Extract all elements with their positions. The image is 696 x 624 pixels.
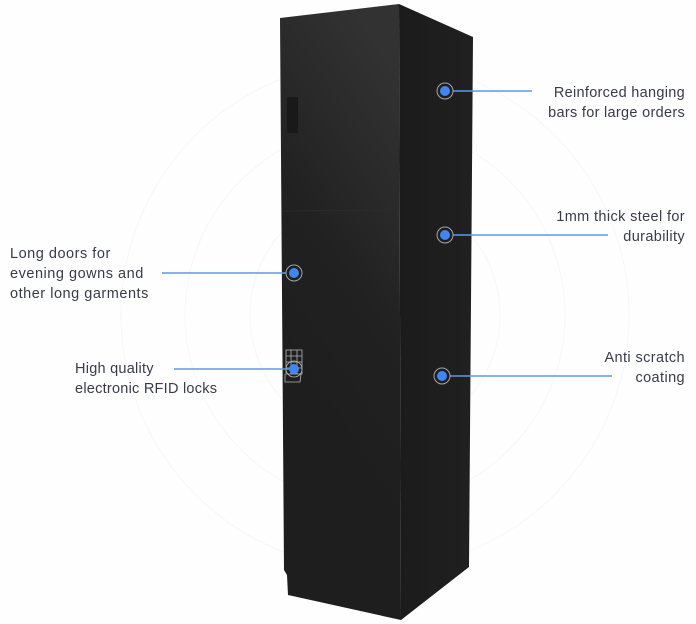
- text: coating: [604, 350, 685, 386]
- text: coating: coating: [635, 370, 685, 386]
- text: RFID locks: electronic RFID locks: [75, 381, 217, 397]
- callout: long doors marker: [162, 265, 302, 281]
- text: steel: durability: [623, 229, 685, 245]
- callout: steel marker: [437, 227, 608, 243]
- text: hanging bars: [548, 85, 685, 121]
- text: steel: [556, 209, 685, 245]
- text: RFID locks: High quality: [75, 361, 154, 377]
- text: long doors: [10, 246, 149, 302]
- callout: RFID lock marker: [174, 364, 299, 374]
- locker side face: [399, 4, 473, 620]
- callout: hanging bars marker: [437, 83, 532, 99]
- locker front face: [280, 4, 401, 620]
- door gap: [282, 210, 399, 211]
- text: long doors: other long garments: [10, 286, 149, 302]
- text: RFID locks: [75, 361, 217, 397]
- text: hanging bars: bars for large orders: [548, 105, 685, 121]
- text: hanging bars: Reinforced hanging: [554, 85, 685, 101]
- locker cabinet: [280, 4, 473, 620]
- background concentric circles: [121, 61, 629, 569]
- electronic keypad lock: [285, 350, 302, 382]
- text: steel: 1mm thick steel for: [556, 209, 685, 225]
- callout: coating marker: [434, 368, 612, 384]
- text: long doors: Long doors for: [10, 246, 111, 262]
- door handle recess: [287, 97, 298, 133]
- text: long doors: evening gowns and: [10, 266, 144, 282]
- text: coating: Anti scratch: [604, 350, 685, 366]
